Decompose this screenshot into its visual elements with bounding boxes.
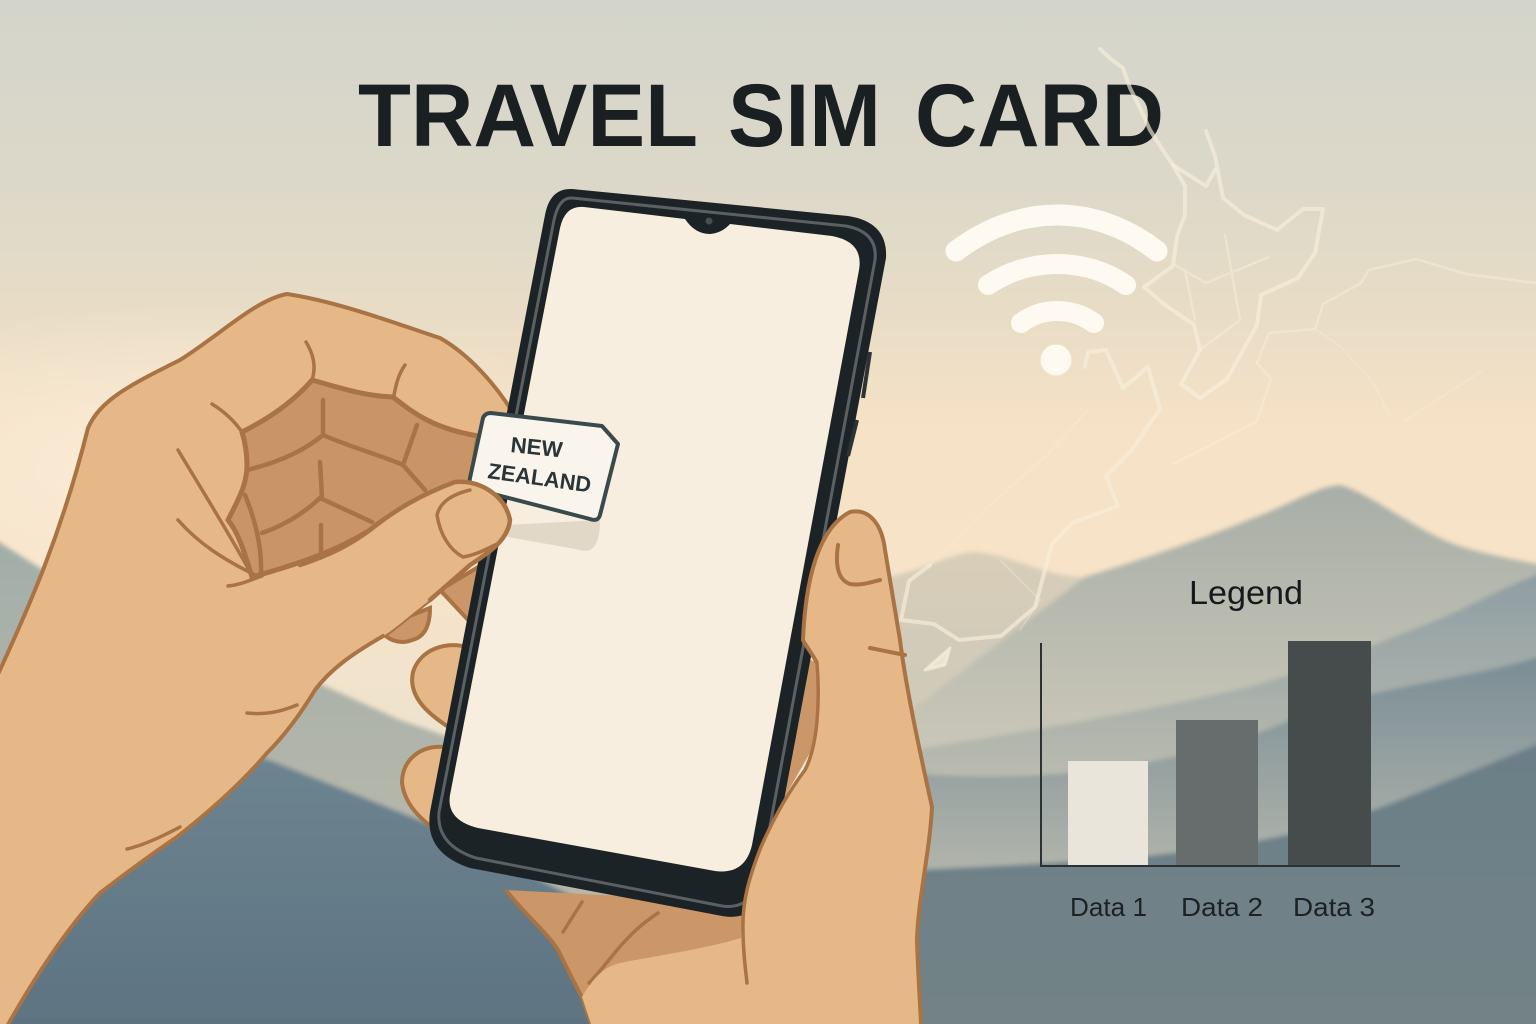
title: CARD: [915, 65, 1164, 165]
SIM card: [470, 413, 618, 520]
bar: Data 3: [1288, 641, 1371, 866]
label: Data 3: Data 3: [1293, 892, 1375, 922]
title: [358, 65, 1164, 165]
left hand fingers behind phone: [402, 645, 470, 830]
left thumb: [300, 482, 510, 635]
palm creases: [245, 400, 425, 575]
title: TRAVEL: [358, 65, 698, 165]
phone camera: [706, 218, 712, 224]
bar chart: [1041, 641, 1400, 922]
SIM card: NEW: [509, 432, 564, 462]
SIM card shadow: [505, 520, 600, 551]
bar: Data 2: [1176, 720, 1258, 866]
SIM card: ZEALAND: [486, 458, 593, 497]
map outline of New Zealand: [901, 49, 1536, 670]
mountains background: [0, 485, 1536, 1024]
right hand palm behind phone: [506, 650, 819, 1024]
label: Data 1: Data 1: [1070, 892, 1147, 922]
bar: Data 1: [1068, 761, 1148, 866]
icon: wifi signal: [956, 215, 1157, 376]
phone screen: [450, 207, 860, 871]
right hand front with thumb: [582, 511, 932, 1024]
palm hollow: [228, 380, 478, 577]
label: Data 2: Data 2: [1181, 892, 1263, 922]
legend title: Legend: [1189, 574, 1303, 611]
left hand: [0, 294, 510, 1024]
title: SIM: [728, 65, 881, 165]
phone side buttons: [848, 352, 870, 456]
phone: [429, 189, 886, 917]
